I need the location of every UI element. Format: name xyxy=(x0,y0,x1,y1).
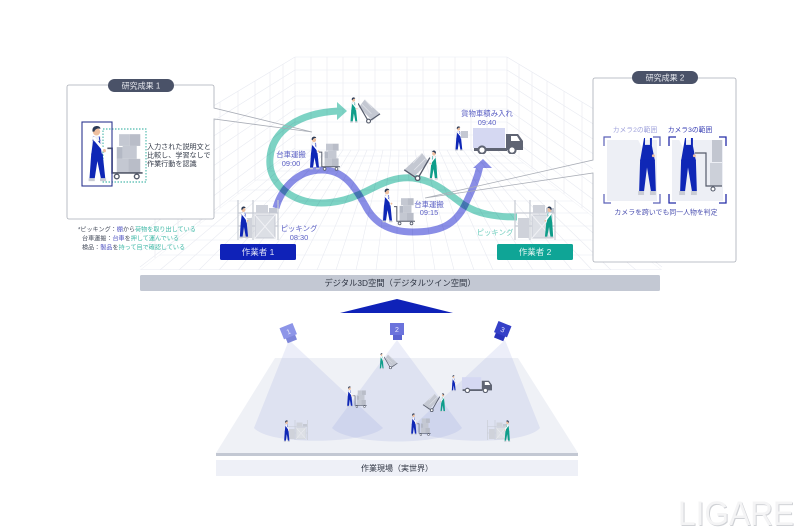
footnote action descriptions: 検品：製品を持って目で確認している xyxy=(82,244,185,252)
camera 2 caption: カメラ2の範囲 xyxy=(613,125,657,134)
camera 3 caption: カメラ3の範囲 xyxy=(668,125,712,134)
badge 2 xyxy=(632,71,698,84)
digital 3D space bar: デジタル3D空間（デジタルツイン空間） xyxy=(324,278,476,288)
real-world label bar: 作業現場（実世界） xyxy=(361,463,433,473)
label: picking 08:30: 08:30 xyxy=(290,233,308,242)
camera 2 view xyxy=(604,137,660,203)
label: cart transport 09:15: 09:15 xyxy=(420,208,438,217)
worker 2 at shelf xyxy=(515,200,555,240)
3D grid room xyxy=(140,57,662,270)
real-world floor xyxy=(216,358,578,456)
badge 2: 研究成果 2 xyxy=(646,72,685,82)
camera 3: 3 xyxy=(499,327,505,335)
floor worker loading and truck xyxy=(452,375,492,393)
label: picking worker 2: ピッキング xyxy=(477,228,514,237)
camera 1: 1 xyxy=(286,329,292,337)
label: truck loading 09:40: 貨物車積み入れ xyxy=(461,109,513,118)
worker detection illustration xyxy=(82,122,146,186)
flow path: worker 1 (blue) xyxy=(276,159,492,232)
description text: 入力された説明文と xyxy=(147,142,211,151)
worker 1 badge: 作業者 1 xyxy=(242,247,275,257)
truck xyxy=(473,128,523,154)
flow path: worker 2 (teal) xyxy=(270,102,517,217)
up arrow xyxy=(340,299,453,313)
worker loading truck xyxy=(455,126,468,151)
label: truck loading 09:40: 09:40 xyxy=(478,118,496,127)
camera cones xyxy=(254,340,540,442)
digital 3D space bar xyxy=(140,275,660,291)
worker 2 with hand truck middle xyxy=(404,150,438,180)
floor worker 1 at shelf xyxy=(284,420,308,442)
panel: research result 2 xyxy=(425,71,736,262)
label: picking 08:30: ピッキング xyxy=(281,224,318,233)
label: cart transport 09:00 xyxy=(276,150,306,168)
camera 1 xyxy=(280,323,299,344)
worker 1 with cart second xyxy=(382,189,415,225)
label: cart transport 09:00: 09:00 xyxy=(282,159,300,168)
same person caption: カメラを跨いでも同一人物を判定 xyxy=(614,208,718,216)
floor worker 1 with cart second xyxy=(411,413,431,436)
description text: 作業行動を認識 xyxy=(147,159,197,168)
panel: research result 1 xyxy=(67,79,312,219)
badge 1: 研究成果 1 xyxy=(122,80,161,90)
floor worker 2 at shelf xyxy=(488,420,510,442)
footnote action descriptions xyxy=(78,226,196,252)
label: truck loading 09:40 xyxy=(461,109,513,127)
footnote action descriptions: *ピッキング：棚から荷物を取り出している xyxy=(78,226,196,234)
worker 2 with hand truck top xyxy=(350,97,380,123)
label: cart transport 09:00: 台車運搬 xyxy=(276,150,306,159)
label: picking 08:30 xyxy=(281,224,318,242)
camera 2: 2 xyxy=(395,327,399,334)
floor worker 2 with hand truck middle xyxy=(423,393,445,412)
floor worker 1 with cart xyxy=(347,386,367,408)
worker 1 with cart xyxy=(310,137,340,170)
description text: 比較し、学習なしで xyxy=(147,150,211,160)
camera 3 xyxy=(492,321,511,342)
worker 2 badge xyxy=(497,244,573,260)
badge 1 xyxy=(108,79,174,92)
worker 1 at shelf xyxy=(238,200,278,240)
worker 1 badge xyxy=(220,244,296,260)
worker 2 badge: 作業者 2 xyxy=(519,247,552,257)
camera 2 xyxy=(390,323,404,340)
footnote action descriptions: 台車運搬：台車を押して運んでいる xyxy=(82,234,179,242)
real-world label bar xyxy=(216,460,578,476)
label: cart transport 09:15: 台車運搬 xyxy=(414,200,444,209)
label: cart transport 09:15 xyxy=(414,200,444,217)
description text xyxy=(147,142,211,168)
floor worker 2 with hand truck top xyxy=(380,353,397,369)
camera 3 view xyxy=(669,137,726,203)
